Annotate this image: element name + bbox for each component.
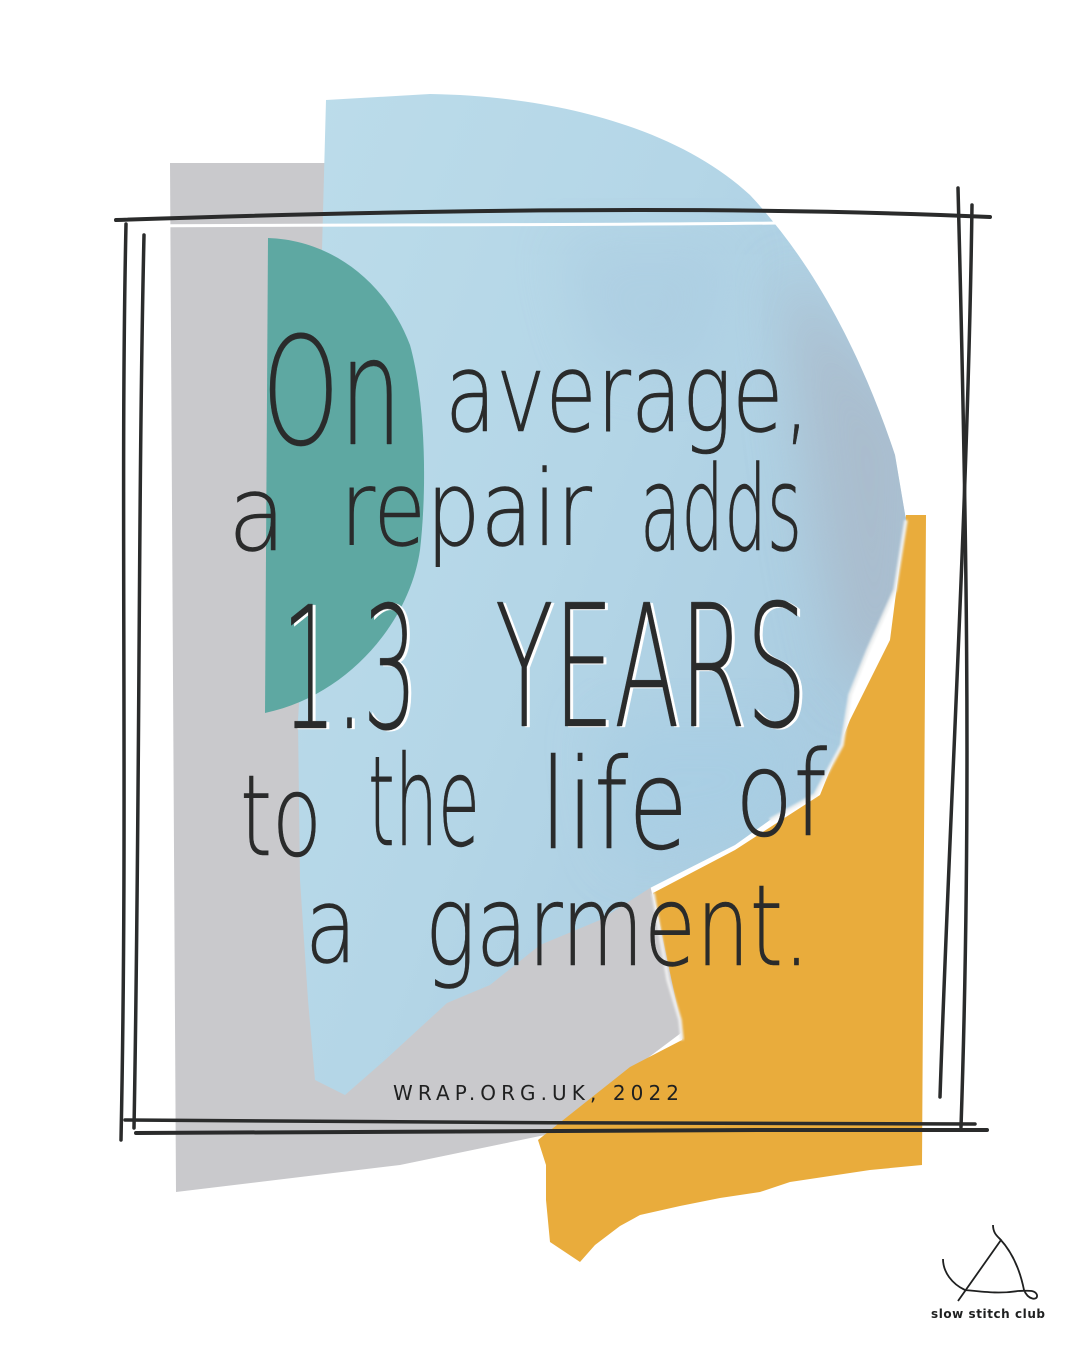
- headline: to the life of: of: [735, 725, 827, 863]
- headline: 1.3 YEARS: 1.3: [282, 571, 417, 769]
- headline: to the life of: life: [540, 733, 688, 878]
- headline: On average: On: [262, 306, 402, 480]
- headline: to the life of: to: [240, 752, 322, 882]
- headline: a garment: garment.: [425, 862, 810, 992]
- headline: a garment: a: [305, 865, 357, 987]
- headline: a repair adds: adds: [640, 440, 802, 578]
- headline: to the life of: [240, 725, 827, 882]
- panel: teal shape: [265, 238, 424, 713]
- logo: slow stitch club: [931, 1225, 1045, 1321]
- headline: a repair adds: a: [228, 453, 286, 575]
- panel: blue torn paper: [298, 94, 930, 1095]
- icon: thread triangle: [943, 1225, 1037, 1301]
- source citation: WRAP.ORG.UK, 2022: [393, 1081, 679, 1105]
- headline: a repair adds: [228, 440, 802, 578]
- panel: orange paper: [538, 515, 926, 1262]
- logo wordmark: slow stitch club: [931, 1307, 1045, 1321]
- headline: a repair adds: repair: [340, 448, 592, 570]
- headline: 1.3 YEARS: [282, 569, 807, 769]
- headline: On average: [262, 306, 810, 480]
- panel: grey patch torn white edge: [653, 893, 682, 1040]
- panel: grey paper: [170, 163, 685, 1192]
- headline: On average: average,: [445, 329, 810, 457]
- frame: hand-drawn double border: [116, 188, 990, 1140]
- headline: a garment: [305, 862, 810, 992]
- headline: 1.3 YEARS: YEARS: [495, 569, 807, 767]
- headline: to the life of: the: [368, 730, 480, 875]
